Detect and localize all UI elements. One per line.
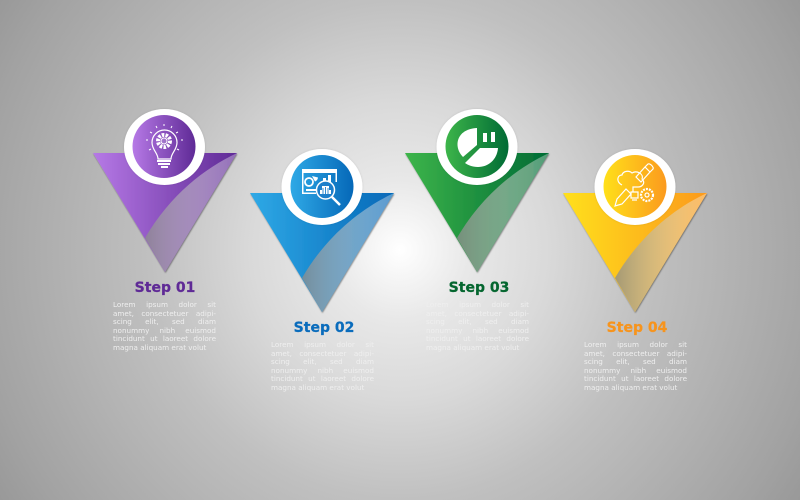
text: step 04 description: amet, consectetuer adipi-: [584, 348, 687, 358]
triangle: step 04: [563, 193, 707, 312]
text: step 04 description: nonummy nibh euismod: [584, 366, 687, 374]
text: step 01 description: tincidunt ut laoreet dolore: [113, 334, 216, 343]
heading: step 01: Step 01: [135, 280, 195, 296]
icon: pie chart and bars: [457, 128, 498, 167]
text: step 03 description: tincidunt ut laoreet dolore: [426, 334, 529, 343]
badge: step 04: [594, 149, 676, 225]
triangle: step 01: [93, 153, 237, 272]
text: step 02 description: magna aliquam erat volut: [271, 382, 364, 392]
text: step 04 description: scing elit, sed diam: [584, 357, 687, 366]
text: step 01 description: nonummy nibh euismod: [113, 326, 216, 334]
text: step 01 description: Lorem ipsum dolor sit: [113, 300, 216, 309]
text: step 01 description: amet, consectetuer adipi-: [113, 308, 216, 318]
overlay: step 03 fold: [457, 153, 549, 272]
text: step 01 description: [113, 300, 216, 352]
icon: dashboard with magnifier: [302, 169, 340, 205]
badge: step 01: [124, 109, 205, 185]
icon: creative pencil, brain and gear: [615, 164, 653, 206]
text: step 03 description: nonummy nibh euismod: [426, 326, 529, 334]
badge: step 02: [282, 149, 362, 225]
text: step 04 description: Lorem ipsum dolor sit: [584, 340, 687, 349]
icon: light bulb with gear: [146, 124, 183, 167]
text: step 03 description: amet, consectetuer adipi-: [426, 308, 529, 318]
text: step 04 description: magna aliquam erat volut: [584, 382, 677, 392]
step 01 marker: [93, 109, 237, 272]
triangle: step 03: [405, 153, 549, 272]
text: step 02 description: nonummy nibh euismod: [271, 366, 374, 374]
heading: step 04: Step 04: [607, 320, 667, 336]
overlay: step 04 fold: [615, 193, 707, 312]
heading: step 02: Step 02: [294, 320, 354, 336]
text: step 04 description: [584, 340, 687, 392]
text: step 02 description: tincidunt ut laoreet dolore: [271, 374, 374, 383]
text: step 03 description: [426, 300, 529, 352]
text: step 04 description: tincidunt ut laoreet dolore: [584, 374, 687, 383]
step 02 marker: [250, 149, 394, 312]
text: step 02 description: [271, 340, 374, 392]
text: step 02 description: amet, consectetuer adipi-: [271, 348, 374, 358]
text: step 01 description: scing elit, sed diam: [113, 317, 216, 326]
triangle: step 02: [250, 193, 394, 312]
text: step 03 description: scing elit, sed diam: [426, 317, 529, 326]
text: step 02 description: scing elit, sed diam: [271, 357, 374, 366]
text: step 03 description: magna aliquam erat volut: [426, 342, 519, 352]
step 04 marker: [563, 149, 707, 312]
text: step 03 description: Lorem ipsum dolor sit: [426, 300, 529, 309]
badge: step 03: [436, 109, 518, 185]
text: step 01 description: magna aliquam erat volut: [113, 342, 206, 352]
overlay: step 01 fold: [145, 153, 237, 272]
overlay: step 02 fold: [302, 193, 394, 312]
heading: step 03: Step 03: [449, 280, 509, 296]
step 03 marker: [405, 109, 549, 272]
text: step 02 description: Lorem ipsum dolor sit: [271, 340, 374, 349]
